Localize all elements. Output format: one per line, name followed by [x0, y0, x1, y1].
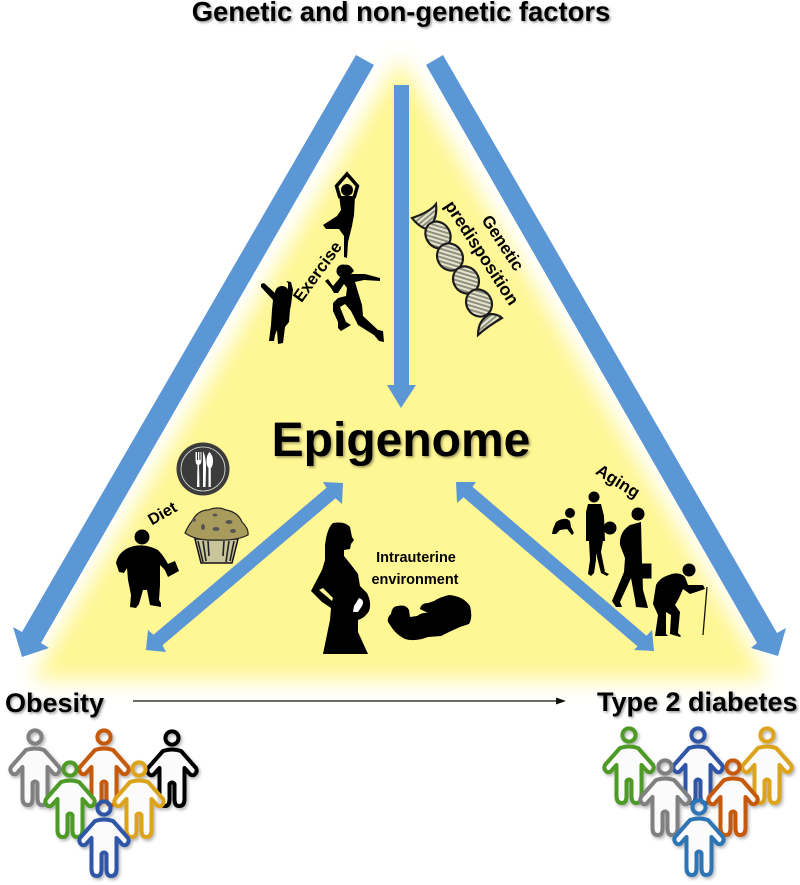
label: Genetic: Genetic — [478, 212, 528, 274]
icon: obese man — [116, 530, 179, 608]
icon: boy with ball — [586, 492, 616, 576]
figure: green person — [45, 762, 95, 837]
label: Type 2 diabetes: Type 2 diabetes — [597, 687, 798, 717]
icon: jumping child — [261, 281, 293, 344]
icon: man with briefcase — [612, 508, 651, 608]
figure: orange person — [708, 760, 758, 835]
label: Diet: Diet — [145, 499, 181, 529]
double arrow: epigenome and type 2 diabetes — [456, 482, 654, 651]
double arrow: epigenome and obesity — [146, 482, 343, 652]
figure: yellow person — [114, 762, 164, 837]
label: Exercise: Exercise — [289, 238, 346, 306]
icon: DNA helix — [412, 204, 502, 335]
icon: crawling baby — [552, 508, 575, 535]
figure: orange person — [79, 730, 129, 805]
label: Intrauterine environment: environment — [371, 572, 459, 588]
label: predisposition: predisposition — [441, 197, 523, 309]
label: Obesity: Obesity — [5, 688, 104, 718]
people group: type 2 diabetes — [604, 728, 792, 875]
arrow: factors to obesity — [13, 55, 374, 657]
people group: obesity — [10, 730, 197, 876]
figure: gray person — [10, 730, 60, 805]
figure: black person — [147, 731, 197, 806]
figure: blue person — [673, 728, 723, 803]
icon: runner — [325, 264, 384, 342]
icon: fetus — [388, 595, 471, 640]
icon: muffin — [185, 508, 248, 563]
figure: green person — [604, 728, 654, 803]
icon: pregnant woman — [311, 522, 370, 654]
figure: blue person — [79, 801, 129, 876]
label: Aging: Aging — [592, 461, 643, 502]
arrow: obesity to type 2 diabetes — [133, 698, 566, 704]
icon: old man with cane — [653, 564, 707, 637]
figure: yellow person — [742, 728, 792, 803]
arrow: factors to type 2 diabetes — [426, 55, 786, 656]
label: Intrauterine environment: Intrauterine — [376, 550, 456, 566]
icon: plate with cutlery — [176, 442, 230, 496]
figure: gray person — [640, 760, 690, 835]
heading: Epigenome: Epigenome — [272, 414, 530, 467]
icon: yoga figure — [323, 171, 358, 258]
yellow triangle background — [32, 58, 768, 680]
figure: light blue person — [674, 800, 724, 875]
label: Intrauterine environment — [371, 550, 459, 588]
arrow: factors to epigenome — [387, 85, 416, 408]
